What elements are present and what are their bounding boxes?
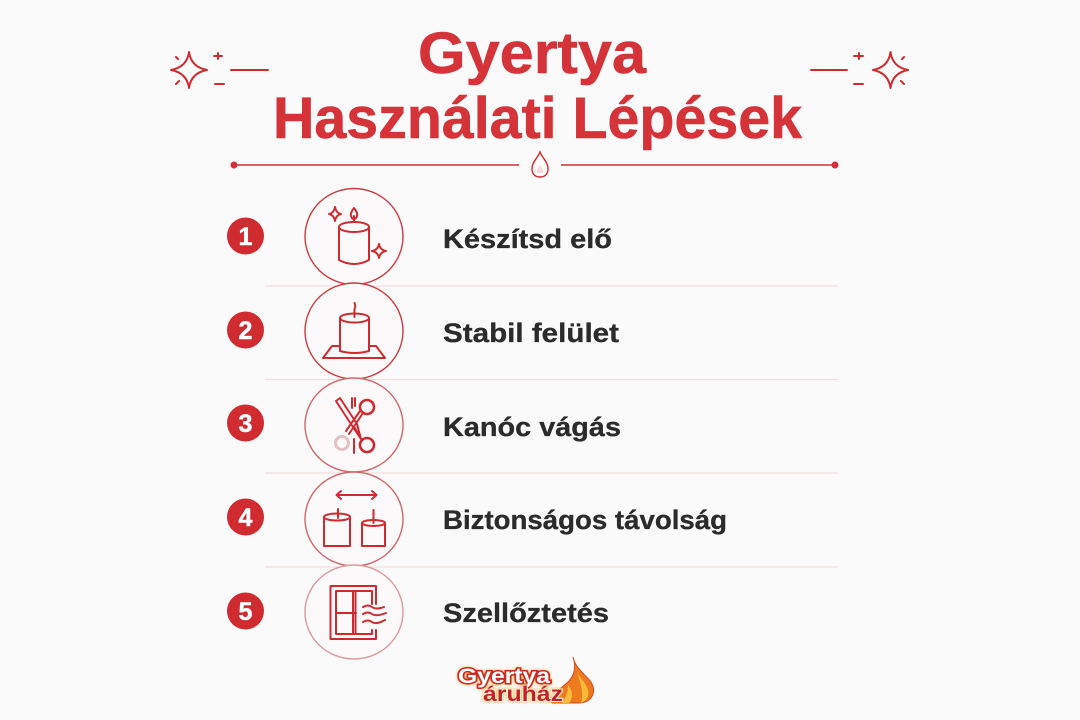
badge 1 xyxy=(227,218,264,254)
decoration: left sparkle xyxy=(171,52,268,88)
badge 1: 1 xyxy=(239,223,253,251)
step 4 xyxy=(227,472,727,566)
title divider with flame xyxy=(230,152,838,177)
logo text: Gyertya xyxy=(458,665,550,688)
decoration: right sparkle xyxy=(811,52,908,88)
label 3: Kanóc vágás xyxy=(443,412,621,442)
step 2 xyxy=(227,283,619,379)
logo flame xyxy=(552,657,593,703)
icon: scissors trimming wick xyxy=(305,378,403,472)
title: Gyertya xyxy=(418,21,647,86)
icon: two candles with distance arrow xyxy=(305,472,403,566)
logo text xyxy=(458,665,563,706)
step 3 xyxy=(227,378,621,472)
label 5: Szellőztetés xyxy=(443,598,609,628)
badge 3: 3 xyxy=(239,410,252,438)
label 1: Készítsd elő xyxy=(443,224,612,254)
badge 4 xyxy=(227,498,264,536)
badge 2: 2 xyxy=(239,317,252,345)
icon: candle with sparkles xyxy=(305,188,403,284)
logo text: áruház xyxy=(483,683,563,706)
badge 2 xyxy=(227,312,264,348)
badge 3 xyxy=(227,404,264,442)
label 4: Biztonságos távolság xyxy=(443,505,727,535)
icon: candle on stable surface xyxy=(305,283,403,379)
badge 5 xyxy=(227,592,264,630)
title xyxy=(273,21,803,151)
icon: open window with airflow xyxy=(305,565,403,659)
label 2: Stabil felület xyxy=(443,318,619,348)
title: Használati Lépések xyxy=(273,86,803,151)
badge 5: 5 xyxy=(239,598,253,626)
step 5 xyxy=(227,565,609,659)
badge 4: 4 xyxy=(239,504,253,532)
logo: Gyertya áruház xyxy=(458,657,593,706)
step 1 xyxy=(227,188,612,284)
